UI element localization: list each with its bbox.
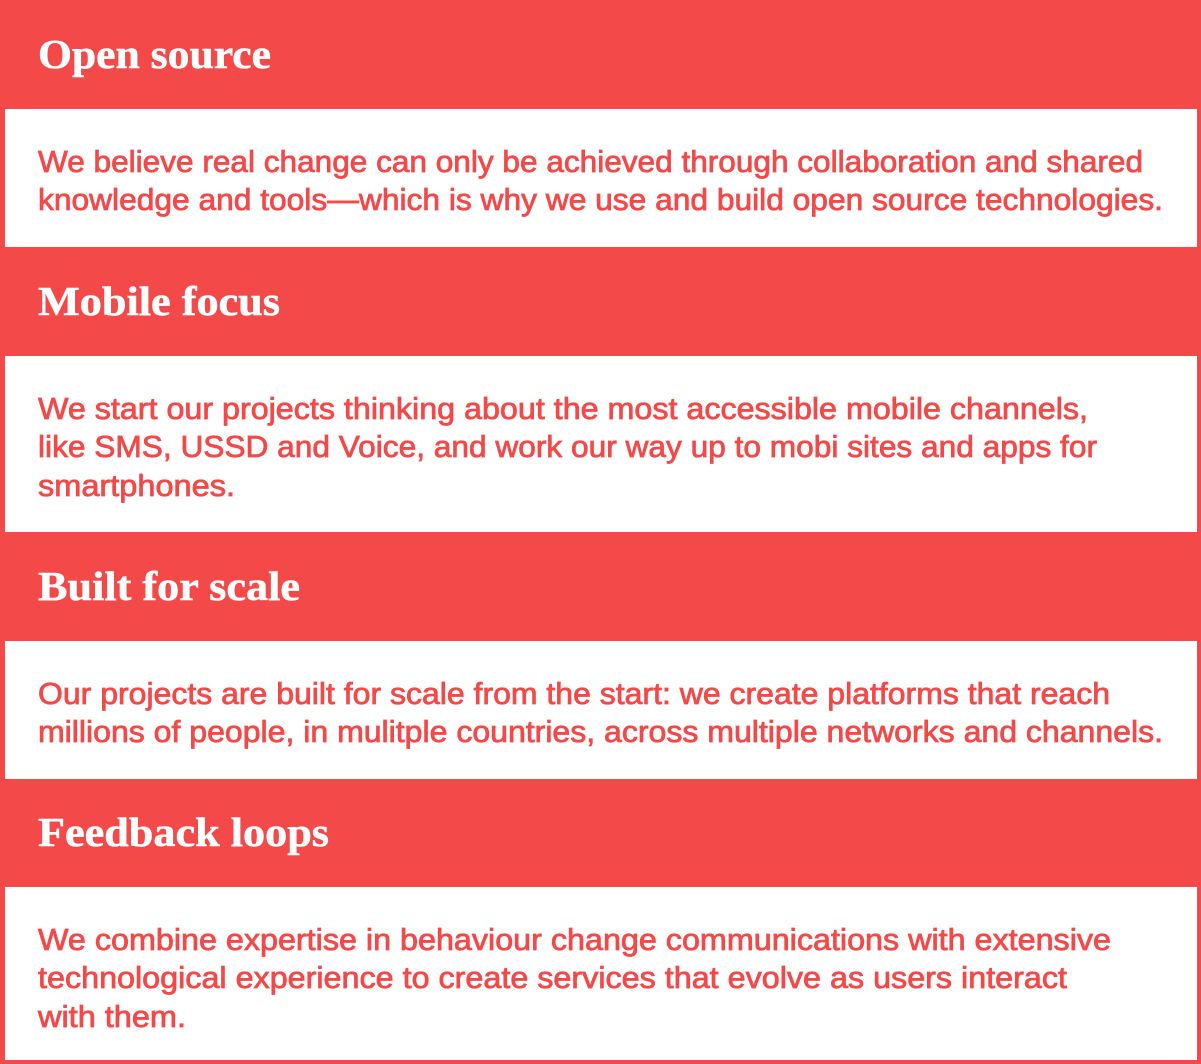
panel: feedback loops	[0, 779, 1201, 1060]
text: mobile focus description: smartphones.	[38, 468, 235, 503]
header band: built for scale	[0, 532, 1201, 641]
body box: feedback loops	[5, 887, 1197, 1060]
body box: mobile focus	[5, 356, 1197, 532]
panel: mobile focus	[0, 247, 1201, 532]
text: feedback loops description: We combine expertise in behaviour change communications with extensive	[38, 922, 1111, 957]
text: open source description: knowledge and tools—which is why we use and build open source technologies.	[38, 182, 1163, 217]
heading: open source: Open source	[38, 31, 271, 77]
heading: feedback loops: Feedback loops	[38, 809, 329, 855]
panel: built for scale	[0, 532, 1201, 779]
text: open source description: We believe real change can only be achieved through collaboration and shared	[38, 144, 1143, 179]
panel: open source	[0, 0, 1201, 247]
body box: built for scale	[5, 641, 1197, 779]
text: feedback loops description: technological experience to create services that evolve as users interact	[38, 960, 1067, 995]
text: feedback loops description: with them.	[37, 999, 186, 1034]
text: mobile focus description: like SMS, USSD and Voice, and work our way up to mobi sites and apps for	[38, 429, 1097, 464]
heading: built for scale: Built for scale	[38, 563, 300, 609]
text: built for scale description: millions of people, in mulitple countries, across multiple networks and channels.	[38, 714, 1163, 749]
text: open source description	[38, 144, 1163, 217]
heading: mobile focus: Mobile focus	[38, 278, 280, 324]
header band: feedback loops	[0, 779, 1201, 887]
text: feedback loops description	[37, 922, 1111, 1034]
text: mobile focus description	[38, 391, 1097, 503]
header band: open source	[0, 0, 1201, 109]
text: mobile focus description: We start our projects thinking about the most accessible mobile channels,	[38, 391, 1088, 426]
text: built for scale description	[38, 676, 1163, 749]
header band: mobile focus	[0, 247, 1201, 356]
text: built for scale description: Our projects are built for scale from the start: we create platforms that reach	[38, 676, 1110, 711]
body box: open source	[5, 109, 1197, 247]
